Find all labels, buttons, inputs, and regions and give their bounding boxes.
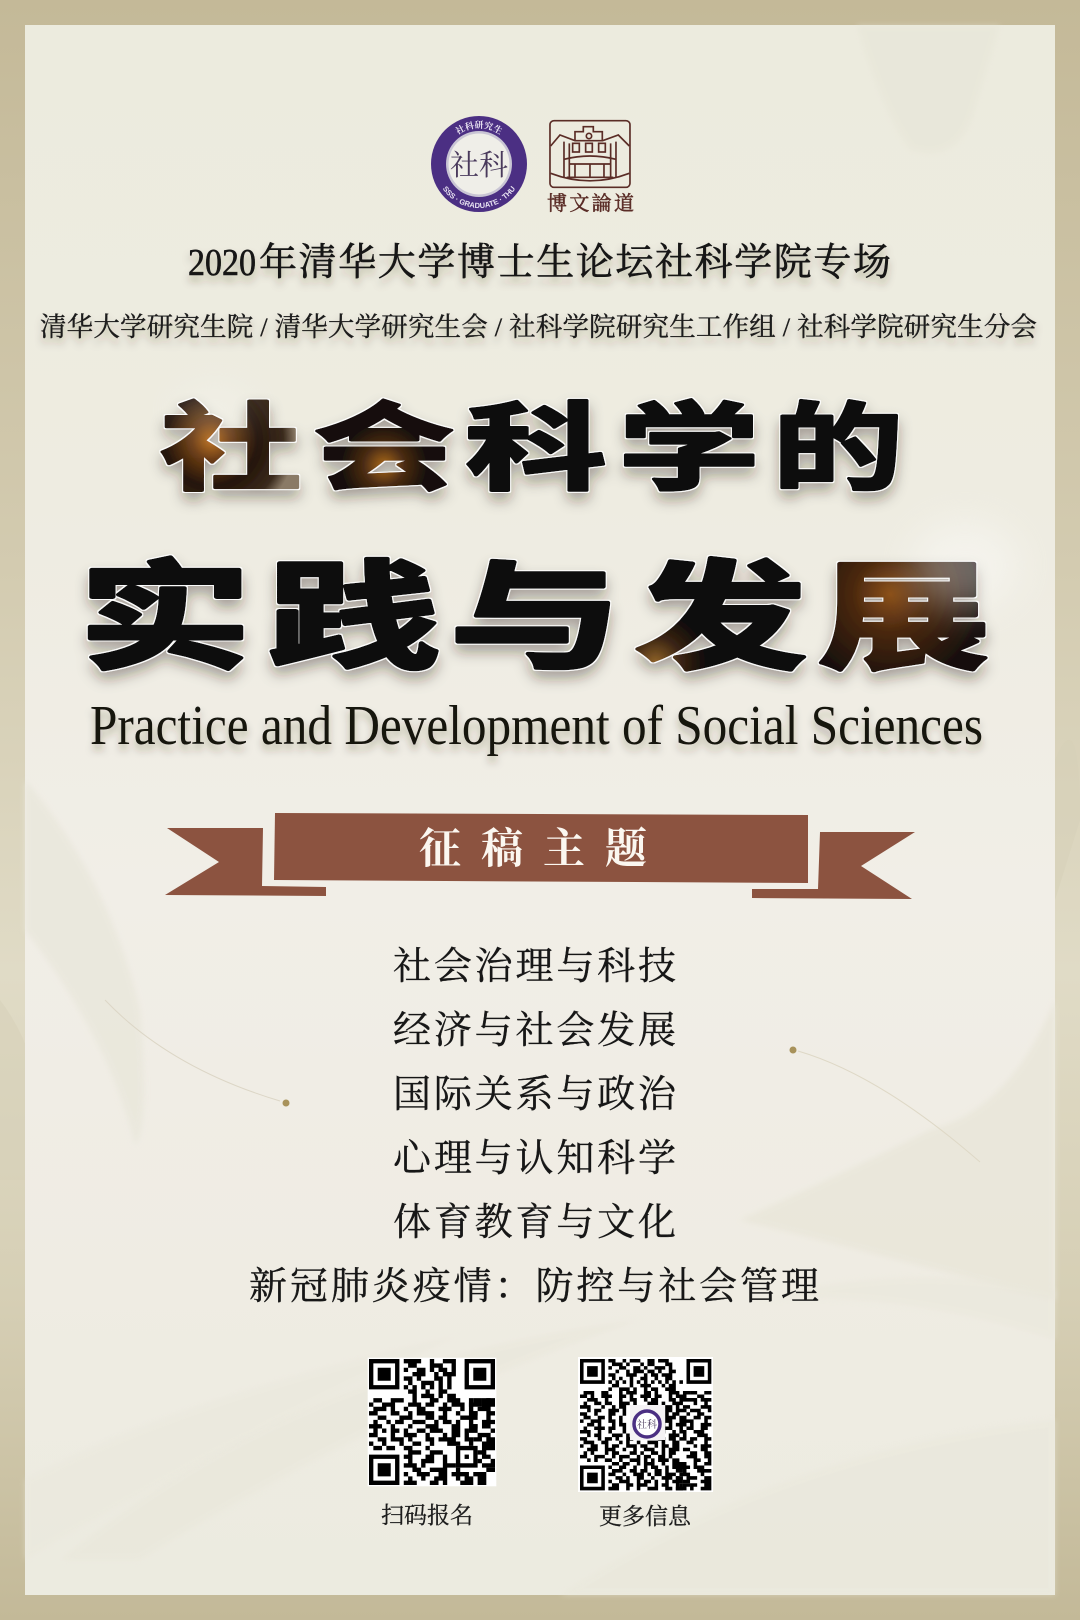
main title line 1: 学 (618, 371, 760, 510)
main title line 1: 的 (773, 371, 903, 510)
main title line 2: 与 (450, 522, 622, 693)
event title: 年清华大学博士生论坛社科学院专场 (259, 242, 891, 284)
decorative dot left with curve (105, 1000, 290, 1106)
organisers line: 清华大学研究生院 / 清华大学研究生会 / 社科学院研究生工作组 / 社科学院研究生分会 (40, 312, 1037, 342)
QR code: more information (578, 1357, 713, 1492)
QR caption: register: 扫码报名 (381, 1503, 473, 1528)
main title line 2 (79, 522, 990, 693)
topic list: 心理与认知科学 (393, 1138, 676, 1180)
main title line 2: 展 (818, 522, 990, 693)
main title line 1: 会 (313, 371, 455, 510)
event title: 2020 (188, 242, 256, 284)
topic list: 国际关系与政治 (393, 1074, 677, 1116)
ribbon main band (274, 813, 808, 883)
topic list: 新冠肺炎疫情：防控与社会管理 (249, 1266, 819, 1308)
English subtitle: Practice and Development of Social Sciences (90, 695, 983, 757)
main title line 2: 发 (635, 522, 807, 693)
logo: building: 博文論道 (547, 192, 634, 215)
main title line 1: 社 (160, 371, 302, 510)
logo: building (547, 121, 634, 215)
logo: graduate union badge (431, 116, 527, 212)
main title line 2: 实 (79, 522, 251, 693)
topic list: 经济与社会发展 (393, 1010, 676, 1052)
ribbon right tail (752, 832, 915, 899)
main title line 1 (160, 371, 903, 510)
QR caption: more info: 更多信息 (599, 1504, 692, 1529)
topic list (249, 946, 819, 1308)
logo: graduate union badge: 社科研究生 (455, 120, 502, 135)
topic list: 体育教育与文化 (393, 1202, 676, 1244)
logo: graduate union badge: SSS · GRADUATE · THU (443, 186, 514, 208)
main title line 1: 科 (465, 371, 607, 510)
main title line 2: 践 (268, 522, 440, 693)
banner heading: 征稿主题 (419, 826, 647, 873)
ribbon left tail (165, 828, 326, 896)
title light flares (175, 386, 1020, 610)
decorative dot right with curve (790, 1046, 980, 1162)
ribbon banner (165, 813, 915, 899)
topic list: 社会治理与科技 (393, 946, 676, 988)
QR code: registration (368, 1358, 496, 1486)
logo: graduate union badge: 社科 (450, 149, 508, 182)
QR code: more information: 社科 (637, 1418, 657, 1431)
